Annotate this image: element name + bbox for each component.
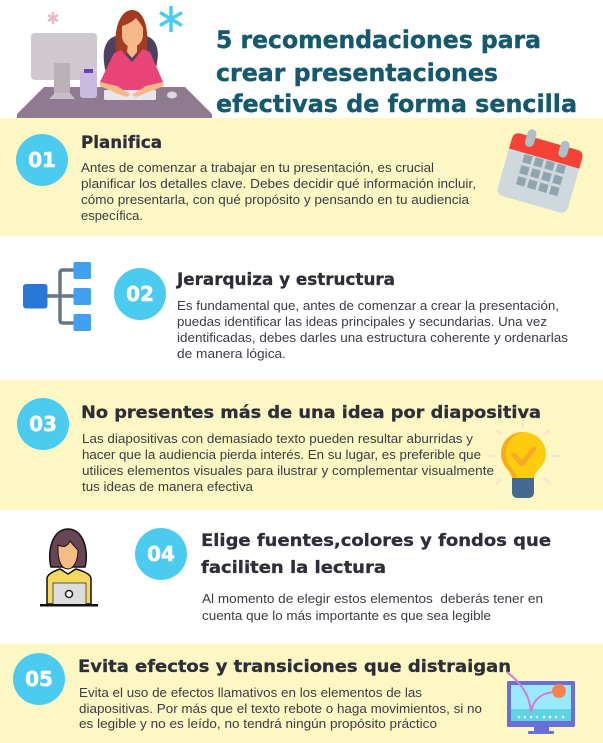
number badge 04: 04 [147,542,175,566]
title: efectivas de forma sencilla [216,90,577,118]
text: Planifica: específica. [81,209,143,223]
number badge 01: 01 [28,148,56,172]
panel: 02 Jerarquiza y estructura [23,262,568,361]
heading: Elige fuentes: faciliten la lectura [201,558,386,578]
text: Elige fuentes [202,592,543,623]
heading: Elige fuentes: Elige fuentes,colores y fondos que [201,531,551,551]
text: No presentes: Las diapositivas con demasiado texto pueden resultar aburridas y [82,432,474,446]
panel: 04 Elige fuentes [40,528,551,623]
text: No presentes: tus ideas de manera efectiva [82,480,253,494]
text: Planifica: cómo presentarla, con qué propósito y pensando en tu audiencia [81,193,469,207]
title [216,26,577,118]
number badge 03: 03 [29,412,57,436]
text: Evita efectos: diapositivas. Por más que el texto rebote o haga movimientos, si no [79,702,482,716]
icon: person with laptop [40,529,98,606]
title: 5 recomendaciones para [216,26,541,54]
text: Jerarquiza: de manera lógica. [177,347,286,361]
illustration: woman at desk [17,6,212,118]
text: No presentes: utilices elementos visuales para ilustrar y complementar visualmente [82,464,494,478]
text: Planifica: Antes de comenzar a trabajar en tu presentación, es crucial [81,161,434,175]
number badge 05 [13,653,65,705]
icon: hierarchy [23,262,91,331]
text: Evita efectos: Evita el uso de efectos llamativos en los elementos de las [79,686,422,700]
text: No presentes [82,432,494,494]
title: crear presentaciones [216,59,498,87]
number badge 05: 05 [25,667,53,691]
text: Planifica [81,161,476,223]
text: Planifica: planificar los detalles clave. Debes decidir qué información incluir, [81,177,476,191]
number badge 02: 02 [126,282,154,306]
text: Evita efectos [79,686,482,731]
panel: 01 Planifica [0,118,603,236]
panel: 05 Evita efectos [0,644,603,743]
text: Jerarquiza [177,299,568,361]
heading: Elige fuentes [201,531,551,578]
icon: monitor with bouncing ball [507,672,575,734]
icon: calendar [496,124,586,214]
text: Jerarquiza: identificadas, debes darles una estructura coherente y ordenarlas [177,331,568,345]
panel: 03 No presentes más de una idea [0,380,603,510]
heading: Evita efectos: Evita efectos y transiciones que distraigan [78,657,511,677]
text: Jerarquiza: puedas identificar las ideas principales y secundarias. Una vez [177,315,547,329]
heading: No presentes: No presentes más de una idea por diapositiva [81,403,541,423]
number badge 02 [114,268,166,320]
heading: Jerarquiza y estructura: Jerarquiza y estructura [176,270,395,290]
number badge 04 [135,528,187,580]
text: Elige fuentes: Al momento de elegir estos elementos deberás tener en [202,592,543,606]
heading: Planifica: Planifica [81,133,162,153]
text: Evita efectos: es legible y no es leído, no tendrá ningún propósito práctico [79,717,437,731]
icon: light bulb [488,420,560,498]
number badge 01 [16,134,68,186]
text: Jerarquiza: Es fundamental que, antes de comenzar a crear la presentación, [177,299,559,313]
number badge 03 [17,398,69,450]
text: No presentes: hacer que la audiencia pierda interés. En su lugar, es preferible que [82,448,481,462]
text: Elige fuentes: cuenta que lo más importante es que sea legible [202,609,491,623]
